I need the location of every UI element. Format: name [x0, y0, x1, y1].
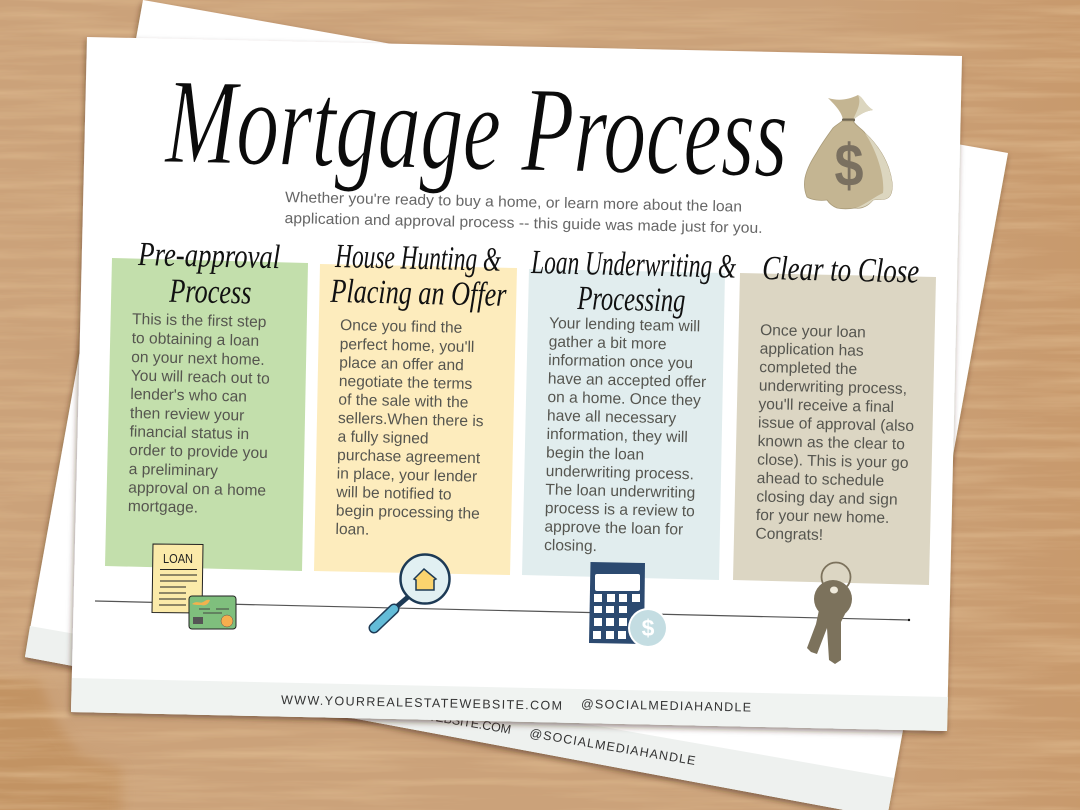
heading: house hunting: House Hunting & — [334, 238, 502, 279]
body text: loan underwriting: information once you — [548, 352, 693, 372]
back sheet footer text: WWW.YOURREALESTATEWEBSITE.COM — [273, 683, 512, 737]
heading: house hunting: Placing an Offer — [329, 273, 507, 314]
body text: pre-approval: to obtaining a loan — [131, 330, 259, 350]
panel: pre-approval — [105, 236, 308, 571]
body text: pre-approval: This is the first step — [132, 311, 267, 331]
subtitle: Whether you're ready to buy a home, or learn more about the loan — [285, 189, 742, 216]
body text: clear to close: underwriting process, — [759, 377, 907, 398]
footer band — [71, 678, 948, 731]
main sheet — [71, 37, 962, 731]
body text: pre-approval: lender's who can — [130, 386, 247, 406]
body text: loan underwriting: process is a review to — [545, 500, 695, 520]
dollar sign on bag: $ — [834, 132, 864, 199]
body text: clear to close: for your new home. — [756, 507, 890, 527]
body text: house hunting: negotiate the terms — [339, 373, 473, 393]
body text: pre-approval: You will reach out to — [131, 367, 270, 388]
back sheet footer text — [273, 683, 696, 768]
heading: loan underwriting: Loan Underwriting & — [530, 244, 737, 286]
body text: house hunting: perfect home, you'll — [339, 336, 475, 356]
body text: clear to close: issue of approval (also — [758, 414, 915, 435]
body text: pre-approval: order to provide you — [129, 442, 268, 462]
body text: loan underwriting: gather a bit more — [548, 333, 667, 353]
panel: clear to close — [733, 250, 936, 585]
body text: clear to close: application has — [759, 340, 864, 360]
body text: house hunting: Once you find the — [340, 317, 462, 337]
heading: house hunting — [329, 238, 508, 314]
body text: clear to close: Once your loan — [760, 322, 866, 341]
icon: calculator with coin — [589, 562, 668, 648]
body text: loan underwriting: The loan underwriting — [545, 481, 695, 502]
body text: house hunting: will be notified to — [335, 484, 452, 504]
body text: pre-approval: approval on a home — [128, 479, 266, 500]
subtitle — [284, 189, 763, 237]
body text: loan underwriting: have all necessary — [547, 407, 677, 427]
body text: house hunting: purchase agreement — [337, 447, 481, 467]
body text: loan underwriting: begin the loan — [546, 444, 644, 464]
body text: loan underwriting: have an accepted offer — [548, 370, 706, 391]
body text: house hunting: begin processing the — [336, 502, 480, 523]
heading: pre-approval: Pre-approval — [137, 236, 281, 276]
body text: house hunting: of the sale with the — [338, 391, 469, 411]
body text: house hunting: sellers.When there is — [338, 410, 484, 430]
heading: pre-approval: Process — [168, 273, 252, 312]
body text: clear to close: completed the — [759, 359, 857, 378]
body text: loan underwriting: closing. — [544, 537, 597, 555]
body text: house hunting — [334, 317, 486, 541]
title: Mortgage Process — [163, 54, 789, 203]
body text: pre-approval: a preliminary — [129, 461, 218, 480]
body text: loan underwriting: Your lending team will — [549, 315, 700, 335]
body text: clear to close: close). This is your go — [757, 451, 909, 472]
icon: keys — [807, 562, 852, 664]
icon: magnifying glass with house — [374, 554, 450, 628]
body text: pre-approval: on your next home. — [131, 349, 265, 369]
body text: loan underwriting — [544, 315, 708, 558]
coin dollar sign: $ — [642, 615, 655, 641]
body text: clear to close: closing day and sign — [756, 488, 898, 509]
subtitle: application and approval process -- this guide was made just for you. — [284, 210, 763, 237]
body text: pre-approval — [128, 311, 272, 518]
body text: loan underwriting: approve the loan for — [544, 518, 683, 539]
heading: loan underwriting: Processing — [576, 280, 686, 320]
loan label: LOAN — [163, 552, 193, 566]
panel: house hunting — [314, 238, 517, 575]
footer website: WWW.YOURREALESTATEWEBSITE.COM — [281, 693, 562, 713]
body text: clear to close: you'll receive a final — [758, 396, 894, 416]
heading: pre-approval — [136, 236, 281, 312]
body text: loan underwriting: on a home. Once they — [547, 389, 701, 409]
body text: loan underwriting: information, they will — [546, 426, 688, 446]
body text: pre-approval: mortgage. — [128, 498, 198, 517]
body text: clear to close: Congrats! — [755, 525, 823, 544]
icon: loan document and credit card — [152, 544, 236, 629]
body text: clear to close: ahead to schedule — [757, 470, 884, 490]
body text: house hunting: a fully signed — [337, 428, 429, 448]
body text: pre-approval: financial status in — [129, 423, 249, 443]
body text: clear to close — [755, 322, 917, 546]
body text: house hunting: in place, your lender — [337, 465, 477, 486]
body text: pre-approval: then review your — [130, 405, 245, 425]
body text: house hunting: loan. — [335, 521, 369, 539]
body text: loan underwriting: underwriting process. — [546, 463, 694, 483]
footer social handle: @SOCIALMEDIAHANDLE — [581, 697, 751, 715]
heading: loan underwriting — [529, 244, 737, 321]
timeline — [95, 601, 910, 621]
heading: clear to close: Clear to Close — [762, 250, 920, 291]
back sheet footer text: @SOCIALMEDIAHANDLE — [528, 726, 696, 768]
panel: loan underwriting — [522, 244, 737, 580]
icon: money bag — [804, 95, 892, 209]
body text: house hunting: place an offer and — [339, 354, 464, 374]
body text: clear to close: known as the clear to — [757, 433, 905, 453]
